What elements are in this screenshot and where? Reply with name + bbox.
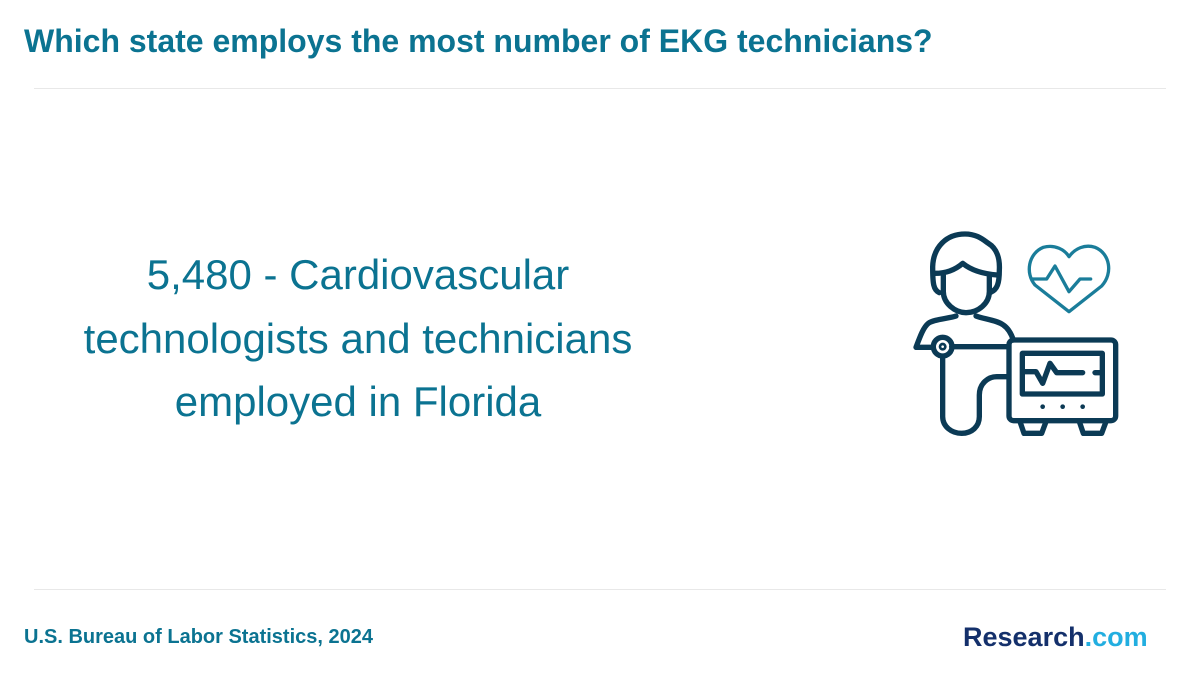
icon: technician with EKG monitor and heart bbox=[913, 231, 1118, 436]
title: Which state employs the most number of EKG technicians? bbox=[24, 23, 933, 59]
main statistic text: 5,480 - Cardiovascular bbox=[147, 251, 569, 298]
main statistic text: technologists and technicians bbox=[84, 314, 632, 362]
source: U.S. Bureau of Labor Statistics, 2024 bbox=[24, 626, 373, 648]
main statistic text bbox=[84, 251, 632, 425]
main statistic text: employed in Florida bbox=[175, 378, 541, 425]
icon: technician and monitor bbox=[916, 234, 1116, 433]
icon: heart with pulse bbox=[1029, 246, 1109, 312]
logo: Research.com: Research.com bbox=[963, 622, 1148, 652]
